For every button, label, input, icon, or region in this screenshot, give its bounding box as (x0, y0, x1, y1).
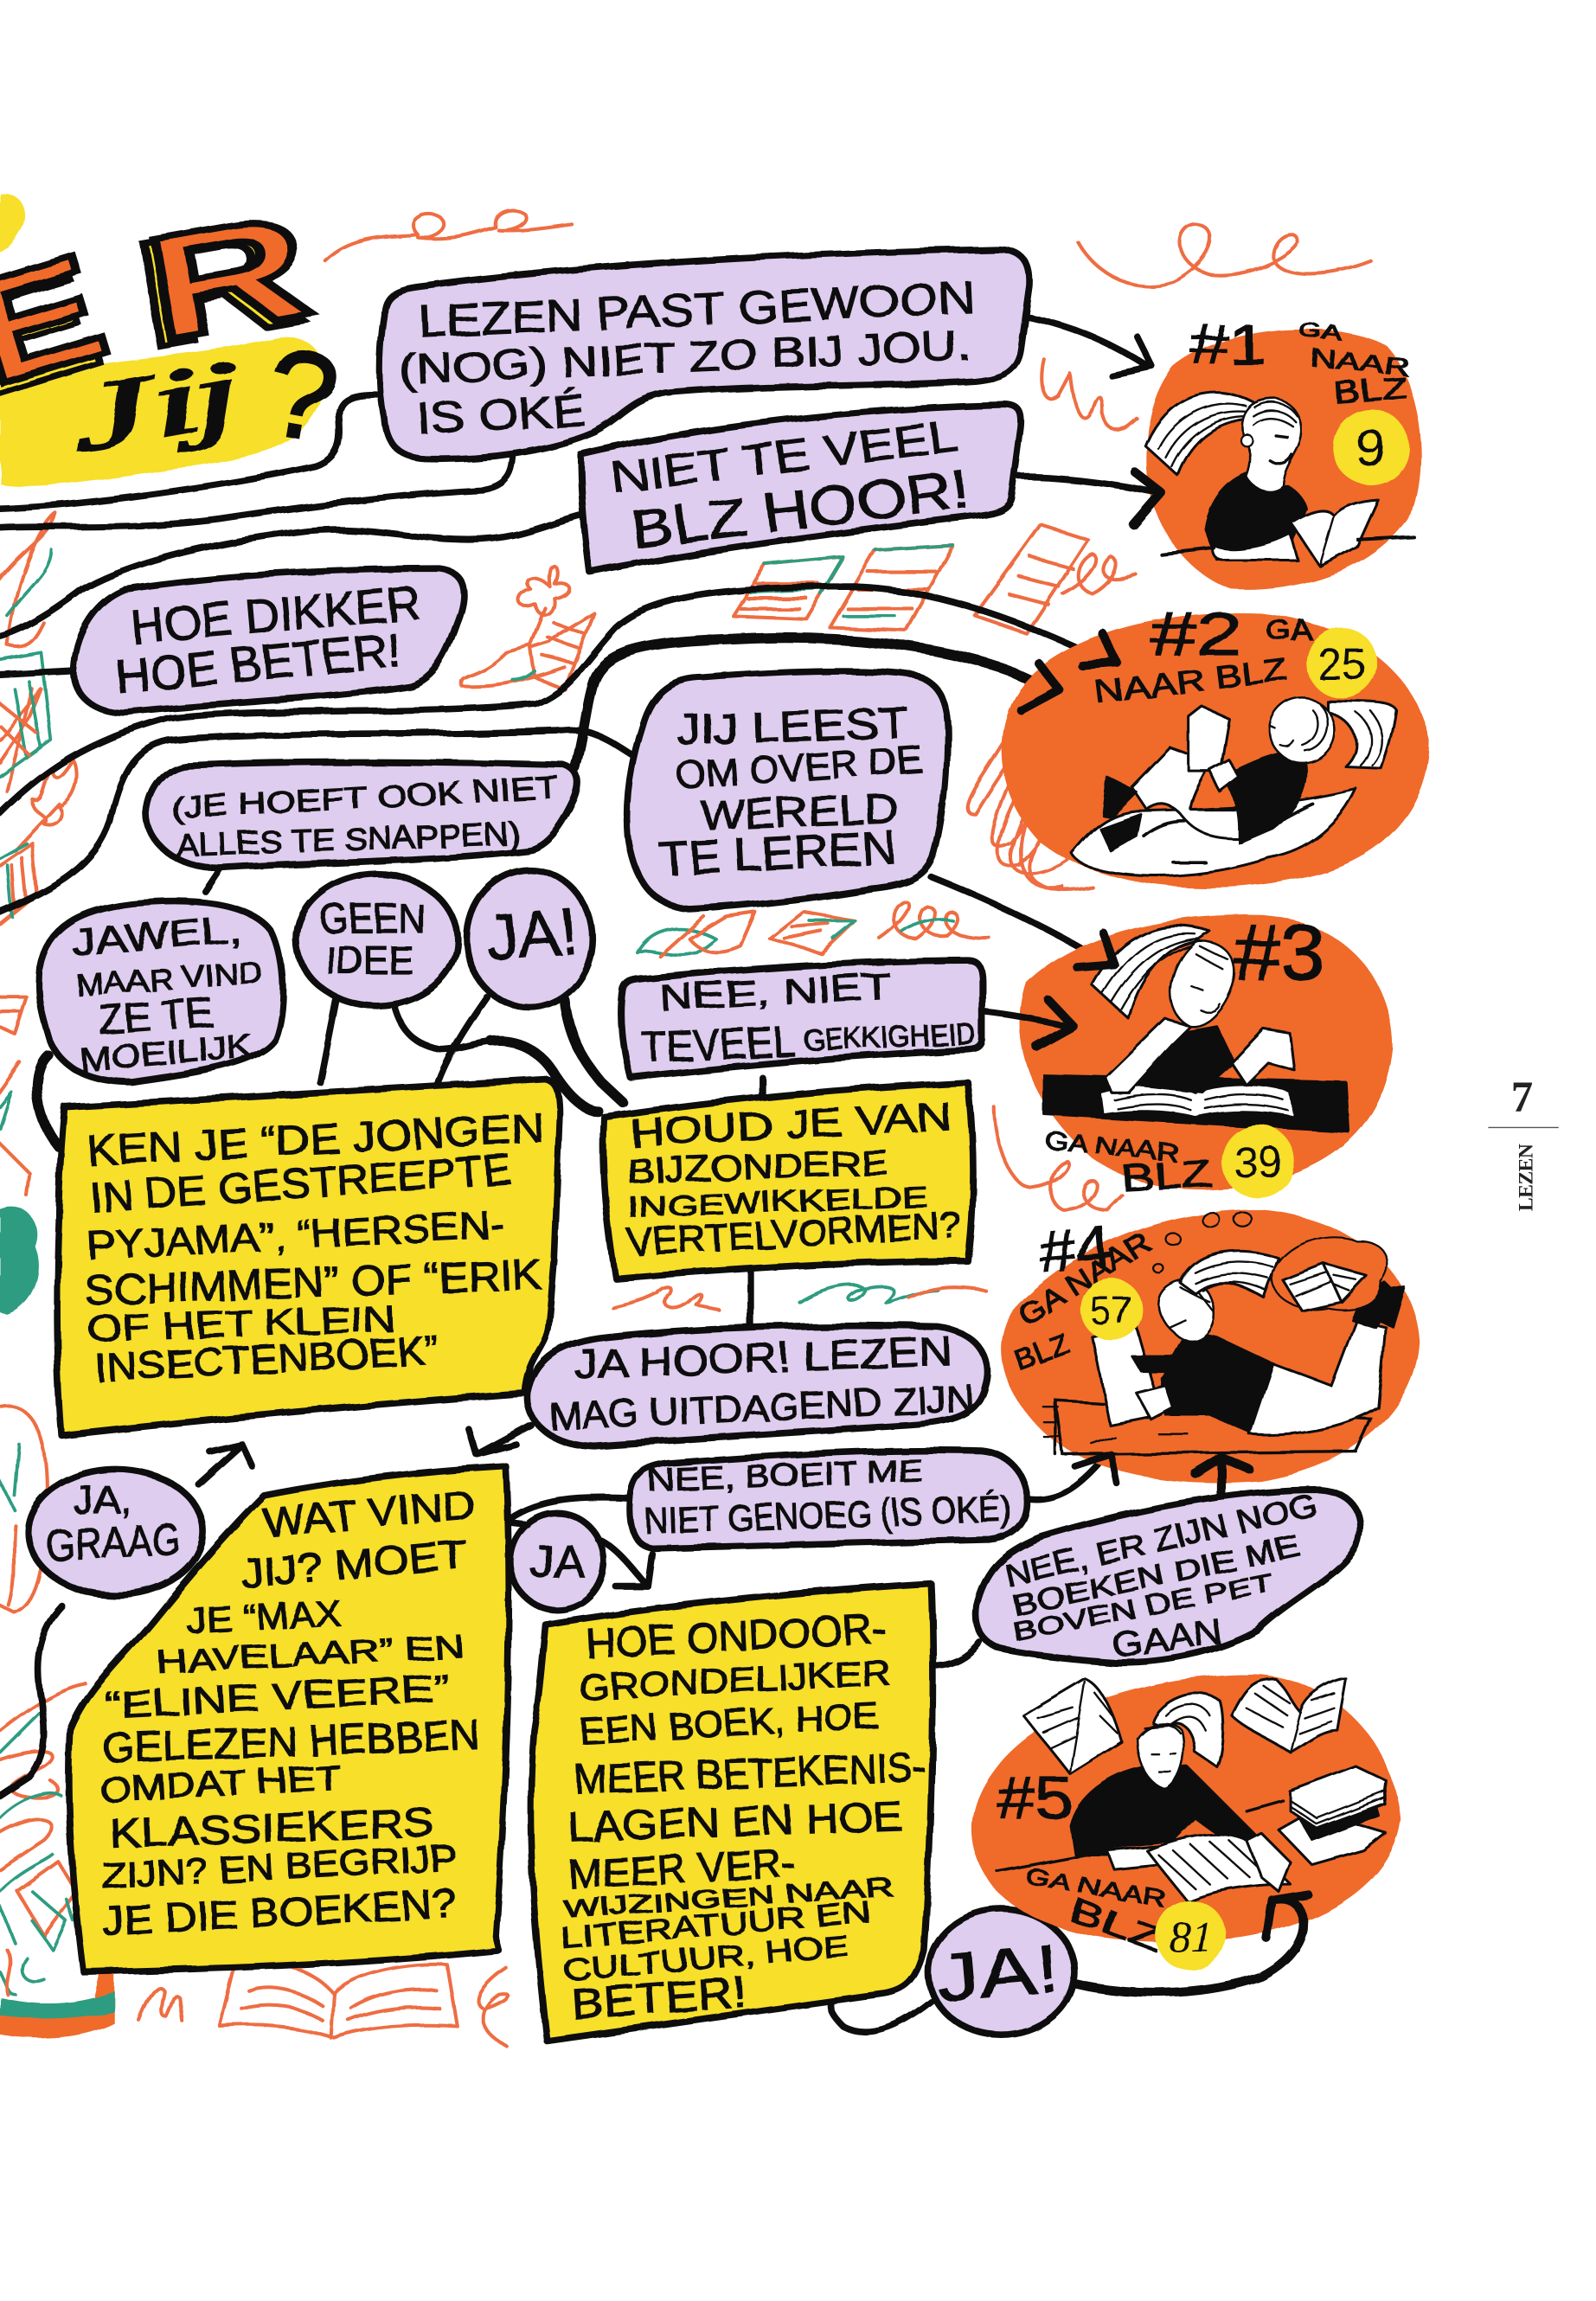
outcome 4: reader lying on rug (1002, 1209, 1420, 1483)
text (548, 1329, 975, 1439)
text (84, 1105, 545, 1390)
text: IS OKÉ (416, 386, 586, 444)
text: BETER! (569, 1967, 748, 2029)
bubble: jawel maar vind ze te moeilijk (39, 901, 283, 1082)
text: EEN BOEK, HOE (578, 1695, 880, 1751)
text: MEER VER- (567, 1840, 797, 1898)
text: MEER BETEKENIS- (574, 1745, 926, 1803)
label (1093, 601, 1313, 711)
text: ZĲN? EN BEGRĲP (101, 1837, 458, 1896)
label: GA (1266, 614, 1313, 645)
bubble: ja (466, 869, 593, 1007)
label: #2 (1151, 601, 1242, 670)
text: GEEN (320, 896, 426, 942)
arrowhead: niet te veel (1133, 472, 1161, 525)
label: GA NAAR (1013, 1226, 1157, 1333)
text: OMDAT HET (98, 1758, 342, 1810)
label: #4 (1036, 1215, 1115, 1285)
label: BLZ (1010, 1328, 1074, 1377)
blob (972, 1675, 1401, 1942)
text (399, 272, 977, 444)
arrow: to outcome 1 from bubble (1029, 317, 1152, 375)
arrowhead: to outcome 2 lower (1021, 663, 1059, 709)
text: GRAAG (45, 1514, 183, 1572)
text: WERELD (700, 785, 899, 839)
box: hoe ondoorgrondelijker (530, 1584, 933, 2041)
text: SCHIMMEN” OF “ERIK (84, 1252, 542, 1315)
text: INGEWIKKELDE (626, 1181, 928, 1224)
title: handwritten "jij?" (61, 322, 348, 472)
bubble: nee er zijn nog boeken (976, 1486, 1360, 1666)
text (98, 1482, 481, 1945)
text (559, 1606, 926, 2029)
text (1001, 1486, 1320, 1666)
bubble: ja: JA! (933, 1930, 1062, 2016)
blob (1002, 1209, 1420, 1483)
bubble: ja (928, 1909, 1074, 2035)
label: BLZ (1120, 1153, 1213, 1198)
arrow: nee er zijn to outcome 4 (1195, 1458, 1249, 1493)
label: NAAR BLZ (1093, 651, 1290, 711)
figure (1145, 392, 1413, 566)
text (657, 700, 924, 886)
arrow: ja to outcome 5 (1074, 1894, 1308, 1993)
bubble: je hoeft ook niet alles te snappen (146, 762, 579, 868)
box: ken je de jongen in de gestreepte pyjama (57, 1080, 560, 1435)
arrowhead: to outcome 2 upper (1082, 633, 1118, 666)
text: NIET TE VEEL (608, 411, 960, 502)
text: JE “MAX (186, 1593, 342, 1641)
label: GA NAAR (1022, 1862, 1169, 1913)
text: MAAR VIND (74, 955, 264, 1003)
text: WAT VIND (260, 1482, 477, 1546)
outcome 2: reader on cushion (1002, 601, 1430, 888)
text: JA HOOR! LEZEN (574, 1329, 953, 1388)
text: NEE, BOEIT ME (647, 1452, 924, 1498)
bubble: lezen past gewoon niet (380, 249, 1029, 459)
text: GEKKIGHEID (803, 1018, 977, 1057)
text (45, 1479, 183, 1572)
section label: LEZEN (1515, 1144, 1537, 1211)
text: ZE TE (97, 990, 215, 1043)
text: CULTUUR, HOE (562, 1928, 850, 1988)
text: BĲZONDERE (626, 1142, 888, 1191)
arrowhead: nee (1036, 1000, 1074, 1047)
label: GA NAAR (1043, 1126, 1181, 1168)
outcome 5: reader with many books (972, 1675, 1401, 1971)
text: OM OVER DE (675, 738, 924, 798)
connector lines (0, 394, 1103, 2032)
page badge 39 (1221, 1125, 1295, 1198)
outcome 1: reader (1145, 313, 1421, 590)
figure (997, 1679, 1387, 1901)
bubble: ja: JA (531, 1536, 586, 1588)
bubble: geen idee (296, 874, 458, 1006)
title: letters ER: R (134, 183, 322, 372)
figure (1044, 926, 1349, 1132)
title: handwritten "jij?": ? (256, 322, 348, 470)
page badge 9: 9 (1356, 419, 1386, 478)
page badge 57: 57 (1090, 1291, 1132, 1333)
text: TE LEREN (657, 822, 898, 886)
text (625, 1094, 962, 1264)
page badge 25 (1306, 627, 1377, 698)
bubble: nee niet teveel gekkigheid (621, 960, 983, 1078)
arrow: ja to hoe ondoor (599, 1540, 652, 1586)
bubble: ja hoor lezen mag uitdagend zijn (528, 1326, 987, 1445)
title: yellow background shape (0, 193, 325, 486)
blob (1002, 612, 1430, 888)
label (1010, 1215, 1157, 1377)
text: GRONDELĲKER (578, 1651, 892, 1708)
text: PYJAMA”, “HERSEN- (87, 1202, 506, 1268)
bubble: ja: JA! (484, 894, 580, 974)
text: HOE ONDOOR- (585, 1606, 888, 1668)
bubble: niet te veel blz hoor (580, 405, 1022, 572)
text: IN DE GESTREEPTE (88, 1146, 513, 1222)
text: WĲZINGEN NAAR (563, 1874, 894, 1924)
text: (NOG) NIET ZO BĲ JOU. (399, 322, 972, 394)
text: NEE, ER ZĲN NOG (1001, 1486, 1320, 1593)
text: GELEZEN HEBBEN (101, 1712, 481, 1772)
text: JĲ? MOET (239, 1532, 469, 1598)
page badge 81 (1156, 1900, 1226, 1971)
text: NEE, NIET (658, 965, 892, 1018)
bubble: ja (510, 1513, 604, 1610)
text: JE DIE BOEKEN? (100, 1881, 458, 1945)
label: BLZ (1332, 370, 1408, 410)
text (320, 896, 426, 982)
text (644, 1452, 1012, 1541)
text (608, 411, 972, 561)
text: BOEKEN DIE ME (1010, 1529, 1303, 1623)
text: INSECTENBOEK” (93, 1328, 439, 1390)
text: LAGEN EN HOE (567, 1793, 903, 1851)
text: GAAN (1110, 1611, 1224, 1666)
text (113, 574, 422, 704)
text (170, 770, 560, 863)
text: JA, (74, 1479, 132, 1522)
text: KEN JE “DE JONGEN (86, 1105, 545, 1176)
bubble: nee boeit me niet genoeg (630, 1451, 1027, 1548)
blob (1146, 329, 1421, 590)
label: #5 (997, 1766, 1074, 1831)
text (70, 907, 264, 1080)
text: LEZEN PAST GEWOON (418, 272, 977, 348)
box: wat vind jij (69, 1466, 509, 1972)
label (1190, 313, 1411, 410)
text: OF HET KLEIN (87, 1298, 396, 1349)
artwork (0, 183, 1430, 2046)
text: LITERATUUR EN (559, 1894, 872, 1956)
text: VERTELVORMEN? (625, 1204, 962, 1264)
bubble: ja graag (28, 1469, 204, 1595)
label: BLZ (1065, 1892, 1167, 1959)
arrow: to outcome 1 from niet te veel (1019, 477, 1158, 493)
text: NIET GENOEG (IS OKÉ) (644, 1488, 1012, 1541)
page badge 81: 81 (1169, 1913, 1213, 1961)
title: letters ER (0, 183, 322, 430)
title: handwritten "jij?": Jĳ (61, 340, 250, 472)
text (641, 965, 977, 1071)
outcome 3: reader at table (1020, 908, 1393, 1198)
arrows (198, 317, 1308, 1993)
page badge 9 (1333, 409, 1409, 485)
text: (JE HOEFT OOK NIET (170, 770, 560, 825)
text: “ELINE VEERE” (104, 1667, 450, 1727)
bubble: jij leest om over de wereld te leren (627, 671, 947, 909)
page number (1488, 1073, 1559, 1211)
page badge 39: 39 (1234, 1138, 1283, 1187)
text: HOE BETER! (113, 622, 403, 704)
doodles: background scribbles (0, 210, 1371, 2046)
arrow: to outcome 3 from nee (983, 1012, 1067, 1027)
text: MAG UITDAGEND ZĲN (548, 1377, 975, 1439)
text: ALLES TE SNAPPEN) (175, 815, 521, 863)
text: IDEE (325, 938, 413, 982)
label: NAAR (1309, 343, 1411, 381)
title: letters ER: R (123, 185, 314, 381)
text: KLASSIEKERS (109, 1800, 436, 1857)
page number: 7 (1511, 1073, 1533, 1121)
page badge 57 (1080, 1279, 1142, 1340)
figure (1072, 698, 1396, 876)
text: HOE DIKKER (128, 574, 422, 654)
text: TEVEEL (641, 1019, 797, 1071)
arrow: ja hoor to wat vind (469, 1426, 531, 1454)
label (1043, 908, 1325, 1198)
blob (1020, 914, 1393, 1189)
label: #3 (1234, 908, 1325, 997)
arrowhead: to outcome 3 from jij leest (1078, 933, 1114, 968)
text: BLZ HOOR! (627, 458, 972, 561)
label: #1 (1190, 313, 1266, 375)
label (997, 1766, 1169, 1959)
box: houd je van bijzondere ingewikkelde vertelvormen (603, 1082, 973, 1279)
page badge 25: 25 (1317, 639, 1366, 689)
figure (1044, 1213, 1405, 1454)
text: MOEILĲK (78, 1028, 253, 1080)
text: JAWEL, (70, 907, 242, 965)
bubble: hoe dikker hoe beter (73, 569, 464, 713)
text: JĲ LEEST (676, 700, 909, 754)
text: BOVEN DE PET (1010, 1567, 1275, 1647)
arrow: nee boeit to outcome 4 (1074, 1454, 1118, 1484)
label: GA (1297, 318, 1343, 345)
arrow: ja graag to ken je box (198, 1445, 253, 1484)
text: HOUD JE VAN (629, 1094, 953, 1155)
text: HAVELAAR” EN (156, 1627, 465, 1680)
